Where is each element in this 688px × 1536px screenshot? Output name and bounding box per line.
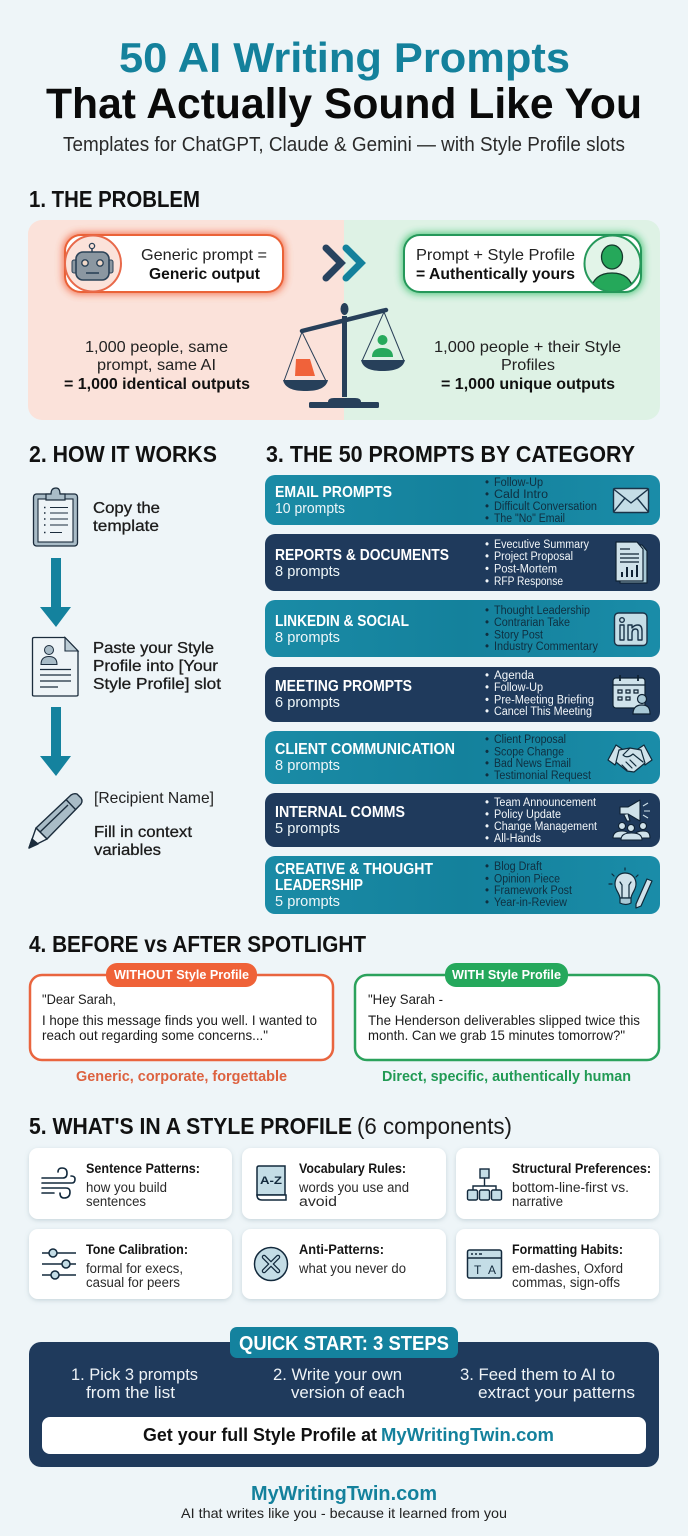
step 1: 1. Pick 3 prompts — [71, 1366, 198, 1384]
panel: linkedin and social: LINKEDIN & SOCIAL — [275, 613, 409, 630]
list: email: Cald Intro — [494, 489, 548, 501]
panel: meeting prompts — [265, 667, 660, 722]
list: meeting: Pre-Meeting Briefing — [494, 694, 594, 706]
heading: 5. style profile: 5. WHAT'S IN A STYLE PROFILE — [29, 1113, 352, 1139]
list: creative: Year-in-Review — [494, 897, 568, 909]
step 3 text: variables — [94, 842, 161, 859]
list: email — [485, 477, 597, 525]
panel: reports and documents — [265, 534, 660, 591]
icon: profile document — [32, 638, 78, 696]
step 2 text — [93, 640, 222, 693]
panel: creative and thought leadership: LEADERSHIP — [275, 877, 363, 894]
card: structural preferences: narrative — [512, 1194, 563, 1209]
list: email: • — [485, 513, 489, 525]
list: client: • — [485, 746, 489, 758]
badge: quick start: QUICK START: 3 STEPS — [239, 1333, 449, 1355]
list: client: Scope Change — [494, 746, 564, 758]
list: creative: • — [485, 874, 489, 886]
title: That Actually Sound Like You — [46, 80, 642, 128]
icon: calendar with person — [613, 675, 650, 714]
generic prompt pill: Generic output — [149, 266, 261, 283]
card: structural preferences: Structural Preferences: — [512, 1161, 651, 1176]
list: internal: Team Announcement — [494, 797, 597, 809]
list: meeting: Cancel This Meeting — [494, 706, 592, 718]
card: sentence patterns: sentences — [86, 1194, 146, 1209]
icon: wind lines — [42, 1168, 75, 1198]
list: client: • — [485, 770, 489, 782]
caption: generic: Generic, corporate, forgettable — [76, 1069, 287, 1085]
icon: pencil — [29, 794, 82, 848]
list: internal: • — [485, 821, 489, 833]
panel: internal comms — [265, 793, 660, 847]
list: linkedin: • — [485, 605, 489, 617]
footer — [181, 1483, 507, 1521]
quote: generic: "Dear Sarah, — [42, 991, 116, 1007]
step 2 text: Paste your Style — [93, 640, 214, 657]
card: sentence patterns — [29, 1148, 232, 1219]
icon: envelope — [614, 488, 648, 512]
list: reports: • — [485, 564, 489, 576]
list: internal: • — [485, 797, 489, 809]
list: email: • — [485, 489, 489, 501]
icon: report document — [616, 542, 647, 583]
panel: email prompts — [265, 475, 660, 525]
panel: meeting prompts: MEETING PROMPTS — [275, 678, 412, 695]
card: vocabulary rules: avoid — [299, 1194, 337, 1209]
panel: linkedin and social: 8 prompts — [275, 630, 340, 646]
badge: without: WITHOUT Style Profile — [114, 967, 249, 982]
icon: sliders — [42, 1249, 76, 1279]
list: client — [485, 734, 592, 782]
list: reports: Evecutive Summary — [494, 539, 589, 551]
call to action bar — [42, 1417, 646, 1454]
badge: quick start — [230, 1327, 458, 1358]
panel: reports and documents: REPORTS & DOCUMENTS — [275, 547, 449, 564]
step 2 — [273, 1366, 405, 1402]
quote: generic — [42, 991, 317, 1043]
list: creative — [485, 861, 573, 909]
generic prompt pill: Generic prompt = — [141, 247, 267, 264]
subtitle: Templates for ChatGPT, Claude & Gemini — with Style Profile slots — [63, 134, 625, 156]
step 2: 2. Write your own — [273, 1366, 402, 1384]
panel: the problem — [28, 220, 660, 420]
panel: client communication — [265, 731, 660, 784]
icon: linkedin — [614, 613, 647, 646]
icon: light bulb and pencil — [609, 868, 652, 908]
panel: reports and documents: 8 prompts — [275, 564, 340, 580]
step 3 text: [Recipient Name] — [94, 790, 214, 807]
heading: 5. style profile: (6 components) — [357, 1113, 512, 1139]
list: creative: Blog Draft — [494, 861, 543, 873]
arrow: down 2 — [40, 707, 71, 776]
title: 50 AI Writing Prompts — [119, 34, 570, 81]
text: identical outputs — [64, 339, 250, 393]
card: formatting habits: commas, sign-offs — [512, 1275, 620, 1290]
list: meeting: • — [485, 682, 489, 694]
step 2 text: Style Profile] slot — [93, 676, 222, 693]
list: reports: • — [485, 576, 489, 588]
panel: client communication: CLIENT COMMUNICATION — [275, 741, 455, 758]
list: internal: • — [485, 809, 489, 821]
panel: client communication: 8 prompts — [275, 758, 340, 774]
heading: 4. before vs after: 4. BEFORE vs AFTER SPOTLIGHT — [29, 931, 366, 957]
panel: quick start — [29, 1327, 659, 1467]
list: client: • — [485, 734, 489, 746]
panel: internal comms: 5 prompts — [275, 821, 340, 837]
generic prompt pill — [63, 233, 285, 294]
card: anti-patterns — [242, 1229, 446, 1299]
list: creative: Framework Post — [494, 885, 573, 897]
list: reports: Project Proposal — [494, 551, 573, 563]
panel: without style profile — [30, 963, 333, 1060]
step 1 text: template — [93, 518, 159, 535]
style profile pill: = Authentically yours — [416, 266, 575, 283]
arrow: down 1 — [40, 558, 71, 627]
quote: authentic: month. Can we grab 15 minutes tomorrow?" — [368, 1027, 625, 1043]
list: client: Client Proposal — [494, 734, 566, 746]
badge: without — [106, 963, 257, 987]
panel: creative and thought leadership: CREATIVE & THOUGHT — [275, 861, 433, 878]
list: internal: Policy Update — [494, 809, 561, 821]
list: internal: • — [485, 833, 489, 845]
quote: authentic: The Henderson deliverables slipped twice this — [368, 1012, 640, 1028]
panel: email prompts: 10 prompts — [275, 501, 345, 517]
panel: linkedin and social — [265, 600, 660, 657]
list: creative: • — [485, 897, 489, 909]
list: client: • — [485, 758, 489, 770]
icon: person — [592, 244, 632, 291]
list: internal: All-Hands — [494, 833, 541, 845]
style profile pill: Prompt + Style Profile — [416, 247, 575, 264]
panel: with style profile — [355, 963, 659, 1060]
list: meeting: Agenda — [494, 670, 535, 682]
list: email: The "No" Email — [494, 513, 565, 525]
list: meeting: • — [485, 670, 489, 682]
list: client: Testimonial Request — [494, 770, 592, 782]
panel: meeting prompts: 6 prompts — [275, 695, 340, 711]
badge: with — [445, 963, 568, 987]
text: unique outputs — [434, 339, 621, 393]
card: tone calibration: Tone Calibration: — [86, 1242, 188, 1257]
list: linkedin: • — [485, 641, 489, 653]
text: unique outputs: 1,000 people + their Style — [434, 339, 621, 356]
icon: balance scale — [283, 303, 405, 408]
list: linkedin: Thought Leadership — [494, 605, 590, 617]
heading: 1. the problem: 1. THE PROBLEM — [29, 186, 200, 212]
list: meeting: • — [485, 694, 489, 706]
icon: crossed circle — [254, 1248, 288, 1280]
list: linkedin: • — [485, 617, 489, 629]
badge: with: WITH Style Profile — [452, 967, 561, 982]
icon: clipboard — [34, 488, 78, 546]
step 2 text: Profile into [Your — [93, 658, 219, 675]
list: creative: • — [485, 885, 489, 897]
list: linkedin: Contrarian Take — [494, 617, 570, 629]
list: reports: • — [485, 539, 489, 551]
card: formatting habits: Formatting Habits: — [512, 1242, 623, 1257]
text: unique outputs: = 1,000 unique outputs — [441, 376, 615, 393]
text: unique outputs: Profiles — [501, 357, 555, 374]
step 3 text — [94, 790, 214, 859]
card: tone calibration: formal for execs, — [86, 1261, 183, 1276]
card: vocabulary rules: Vocabulary Rules: — [299, 1161, 406, 1176]
panel: creative and thought leadership — [265, 856, 660, 914]
call to action bar: MyWritingTwin.com — [381, 1425, 554, 1445]
card: vocabulary rules — [242, 1148, 446, 1219]
heading: 3. the 50 prompts: 3. THE 50 PROMPTS BY CATEGORY — [266, 441, 635, 467]
card: formatting habits: em-dashes, Oxford — [512, 1261, 623, 1276]
icon: org chart — [468, 1169, 502, 1200]
list: linkedin: • — [485, 630, 489, 642]
icon: dictionary — [257, 1166, 286, 1200]
icon: dictionary: A-Z — [260, 1175, 282, 1187]
card: vocabulary rules: words you use and — [298, 1180, 409, 1195]
list: reports: RFP Response — [494, 576, 563, 588]
panel: email prompts: EMAIL PROMPTS — [275, 484, 392, 501]
list: internal: Change Management — [494, 821, 598, 833]
card: anti-patterns: Anti-Patterns: — [299, 1242, 384, 1257]
step 2: version of each — [291, 1384, 405, 1402]
list: reports: • — [485, 551, 489, 563]
card: tone calibration: casual for peers — [86, 1275, 180, 1290]
step 1: from the list — [86, 1384, 175, 1402]
card: sentence patterns: how you build — [86, 1180, 167, 1195]
caption: authentic: Direct, specific, authentically human — [382, 1069, 631, 1085]
icon: robot — [72, 243, 113, 280]
list: reports — [485, 539, 589, 588]
quote: authentic: "Hey Sarah - — [368, 991, 443, 1007]
card: formatting habits — [456, 1229, 659, 1299]
panel: how it works steps — [29, 488, 222, 859]
list: linkedin: Story Post — [494, 630, 544, 642]
list: linkedin: Industry Commentary — [494, 641, 598, 653]
list: email: • — [485, 501, 489, 513]
text: identical outputs: 1,000 people, same — [85, 339, 228, 356]
step 3: extract your patterns — [478, 1384, 635, 1402]
text: identical outputs: = 1,000 identical outputs — [64, 376, 250, 393]
step 3 — [460, 1366, 635, 1402]
quote: authentic — [368, 991, 640, 1043]
icon: megaphone and team — [613, 800, 650, 840]
icon: handshake — [608, 745, 652, 772]
call to action bar: Get your full Style Profile at — [143, 1425, 377, 1445]
list: reports: Post-Mortem — [494, 564, 557, 576]
card: structural preferences — [456, 1148, 659, 1219]
list: email: Follow-Up — [494, 477, 543, 489]
list: linkedin — [485, 605, 598, 653]
title — [46, 34, 642, 128]
step 3: 3. Feed them to AI to — [460, 1366, 615, 1384]
text: identical outputs: prompt, same AI — [97, 357, 216, 374]
quote: generic: reach out regarding some concerns..." — [42, 1027, 268, 1043]
footer: AI that writes like you - because it learned from you — [181, 1505, 507, 1521]
footer: MyWritingTwin.com — [251, 1483, 437, 1505]
list: creative: • — [485, 861, 489, 873]
icon: text window: T A — [474, 1263, 496, 1277]
list: internal — [485, 797, 598, 845]
step 3 text: Fill in context — [94, 824, 193, 841]
arrow: chevrons — [326, 248, 361, 278]
step 1 text: Copy the — [93, 500, 160, 517]
list: email: Difficult Conversation — [494, 501, 597, 513]
card: sentence patterns: Sentence Patterns: — [86, 1161, 200, 1176]
quote: generic: I hope this message finds you well. I wanted to — [42, 1012, 317, 1028]
list: creative: Opinion Piece — [494, 874, 560, 886]
list: meeting: • — [485, 706, 489, 718]
card: anti-patterns: what you never do — [298, 1261, 406, 1276]
step 1 — [71, 1366, 198, 1402]
list: meeting: Follow-Up — [494, 682, 543, 694]
icon: text window — [468, 1250, 502, 1278]
list: email: • — [485, 477, 489, 489]
style profile pill — [402, 233, 643, 294]
list: client: Bad News Email — [494, 758, 571, 770]
card: structural preferences: bottom-line-first vs. — [512, 1180, 629, 1195]
panel: internal comms: INTERNAL COMMS — [275, 804, 405, 821]
panel: creative and thought leadership: 5 prompts — [275, 894, 340, 910]
heading: 2. how it works: 2. HOW IT WORKS — [29, 441, 217, 467]
card: tone calibration — [29, 1229, 232, 1299]
list: meeting — [485, 670, 594, 718]
step 1 text — [93, 500, 160, 535]
